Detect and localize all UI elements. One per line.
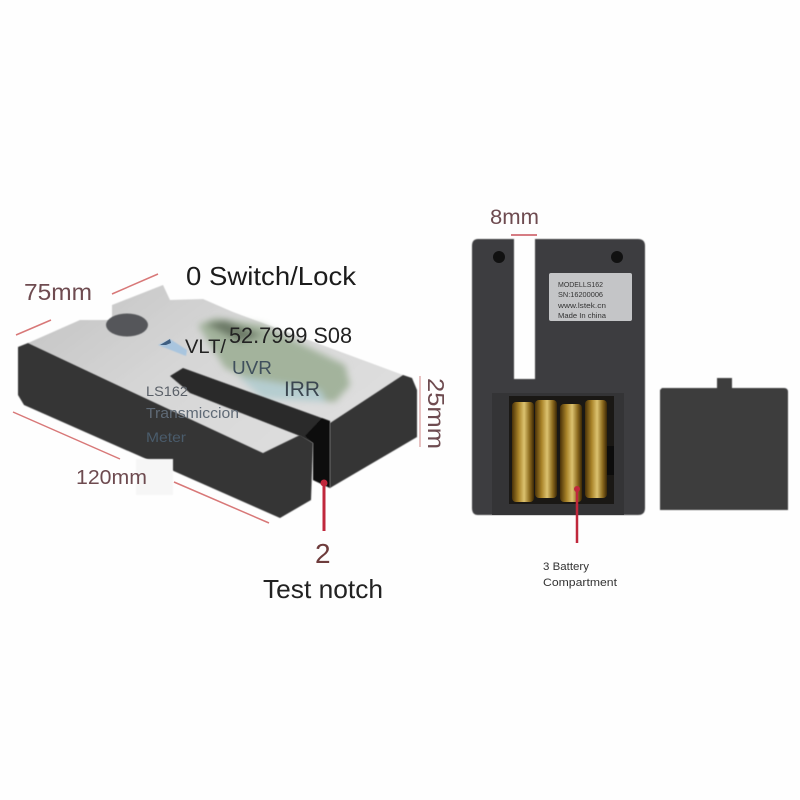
label: reading: 52.7999 S08 [229,323,352,348]
label: 2: 2 [315,538,331,569]
battery 1 [512,402,534,502]
mounting hole left [493,251,505,263]
photo: LS162 meter front view [18,285,417,518]
dimension: 8mm: 8mm [490,206,539,229]
dimension: 120mm [13,412,269,523]
blue arrow logo [158,339,187,356]
label: battery compartment: Compartment [543,577,617,589]
label: transmission: Transmiccion [146,405,239,422]
label: battery compartment [543,561,617,589]
mounting hole right [611,251,623,263]
battery 3 [560,404,582,502]
pointer: battery [574,486,580,543]
test notch slot [170,368,330,488]
battery compartment [492,393,624,515]
model sticker: MODELLS162 [558,280,603,289]
battery 2 [535,400,557,498]
model sticker: www.lstek.cn [557,301,606,310]
dimension: 25mm: 25mm [423,378,449,449]
white patch [136,459,173,495]
label: LS162: LS162 [146,383,188,399]
dimension: 75mm [16,274,158,335]
green display area [198,318,350,402]
battery cover [660,378,788,510]
label: switch lock: 0 Switch/Lock [186,261,357,291]
dimension: 75mm: 75mm [24,279,92,305]
model sticker: SN:16200006 [558,290,603,299]
left front dark face [18,343,313,518]
model sticker: Made In china [558,311,607,320]
model sticker [549,273,632,321]
dimension: 120mm: 120mm [76,467,147,489]
label: IRR: IRR [284,378,320,401]
label: meter: Meter [146,429,186,445]
right front dark face [330,375,417,488]
device top surface [28,285,403,453]
label: test notch: Test notch [263,574,383,604]
back panel of device [472,239,645,515]
label: VLT: VLT/ [185,337,227,358]
power switch button [106,314,148,336]
label: battery compartment: 3 Battery [543,561,590,573]
battery 4 [585,400,607,498]
label: UVR: UVR [232,358,272,378]
pointer: test notch [320,480,328,531]
